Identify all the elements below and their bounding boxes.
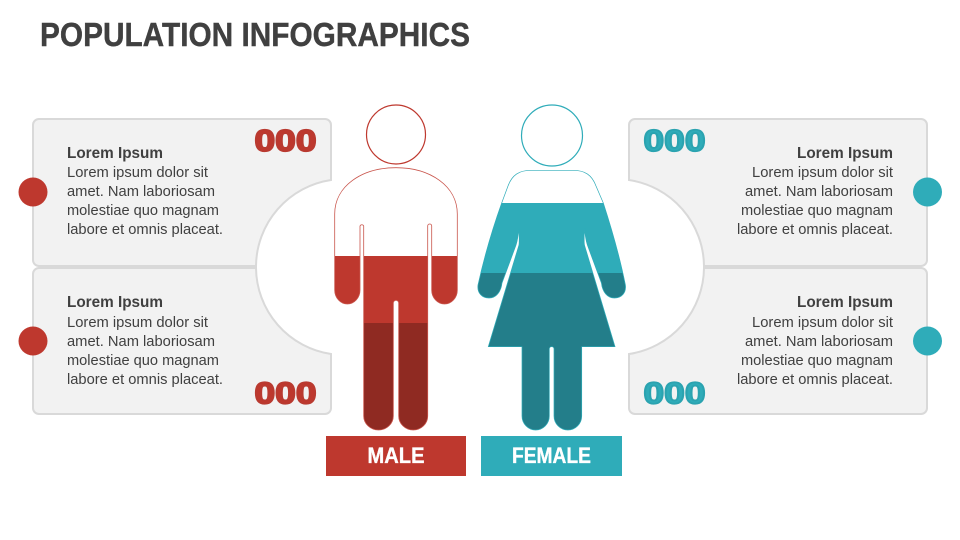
body text: top right: [737, 165, 893, 238]
female head: [522, 105, 582, 166]
label: male: [326, 436, 466, 476]
heading: bottom left: Lorem Ipsum: [67, 294, 163, 311]
body text: top right: Lorem ipsum dolor sit: [752, 165, 893, 181]
body text: bottom right: amet. Nam laboriosam: [745, 334, 893, 350]
body text: top left: labore et omnis placeat.: [67, 222, 223, 238]
heading: top right: Lorem Ipsum: [797, 145, 893, 162]
panel: bottom right: [629, 268, 942, 414]
body text: bottom right: Lorem ipsum dolor sit: [752, 315, 893, 331]
marker dot: bottom right: [913, 326, 942, 356]
body text: top left: [67, 165, 223, 238]
body text: top right: amet. Nam laboriosam: [745, 184, 893, 200]
panel: top right: [629, 119, 942, 266]
heading: bottom right: Lorem Ipsum: [797, 294, 893, 311]
body text: bottom right: molestiae quo magnam: [741, 353, 893, 369]
male body fill levels: [335, 256, 457, 430]
body text: top left: Lorem ipsum dolor sit: [67, 165, 208, 181]
male body outline: [335, 168, 457, 430]
male figure: [330, 105, 465, 433]
label: female: [481, 436, 622, 476]
label: male: MALE: [368, 443, 424, 468]
label: female: FEMALE: [512, 443, 591, 468]
number: top right: 000: [644, 123, 706, 158]
number: bottom left: 000: [254, 376, 316, 410]
female body fill levels: [478, 203, 626, 430]
body text: top left: molestiae quo magnam: [67, 203, 219, 219]
male head: [366, 105, 426, 164]
number: top left: 000: [254, 123, 316, 158]
heading: top left: Lorem Ipsum: [67, 145, 163, 162]
body text: bottom right: [737, 315, 893, 388]
marker dot: top left: [18, 178, 48, 206]
body text: top right: molestiae quo magnam: [741, 203, 893, 219]
body text: bottom left: amet. Nam laboriosam: [67, 334, 215, 350]
panel: top left: [18, 119, 331, 266]
body text: bottom left: [67, 315, 223, 388]
body text: bottom left: Lorem ipsum dolor sit: [67, 315, 208, 331]
body text: top left: amet. Nam laboriosam: [67, 184, 215, 200]
female figure: [478, 104, 626, 430]
body text: top right: labore et omnis placeat.: [737, 222, 893, 238]
marker dot: bottom left: [18, 326, 48, 356]
panel: bottom left: [18, 268, 331, 414]
body text: bottom right: labore et omnis placeat.: [737, 372, 893, 388]
body text: bottom left: molestiae quo magnam: [67, 353, 219, 369]
number: bottom right: 000: [644, 376, 706, 410]
title: POPULATION INFOGRAPHICS: [40, 16, 470, 53]
female body outline: [478, 170, 626, 430]
marker dot: top right: [913, 178, 942, 206]
body text: bottom left: labore et omnis placeat.: [67, 372, 223, 388]
